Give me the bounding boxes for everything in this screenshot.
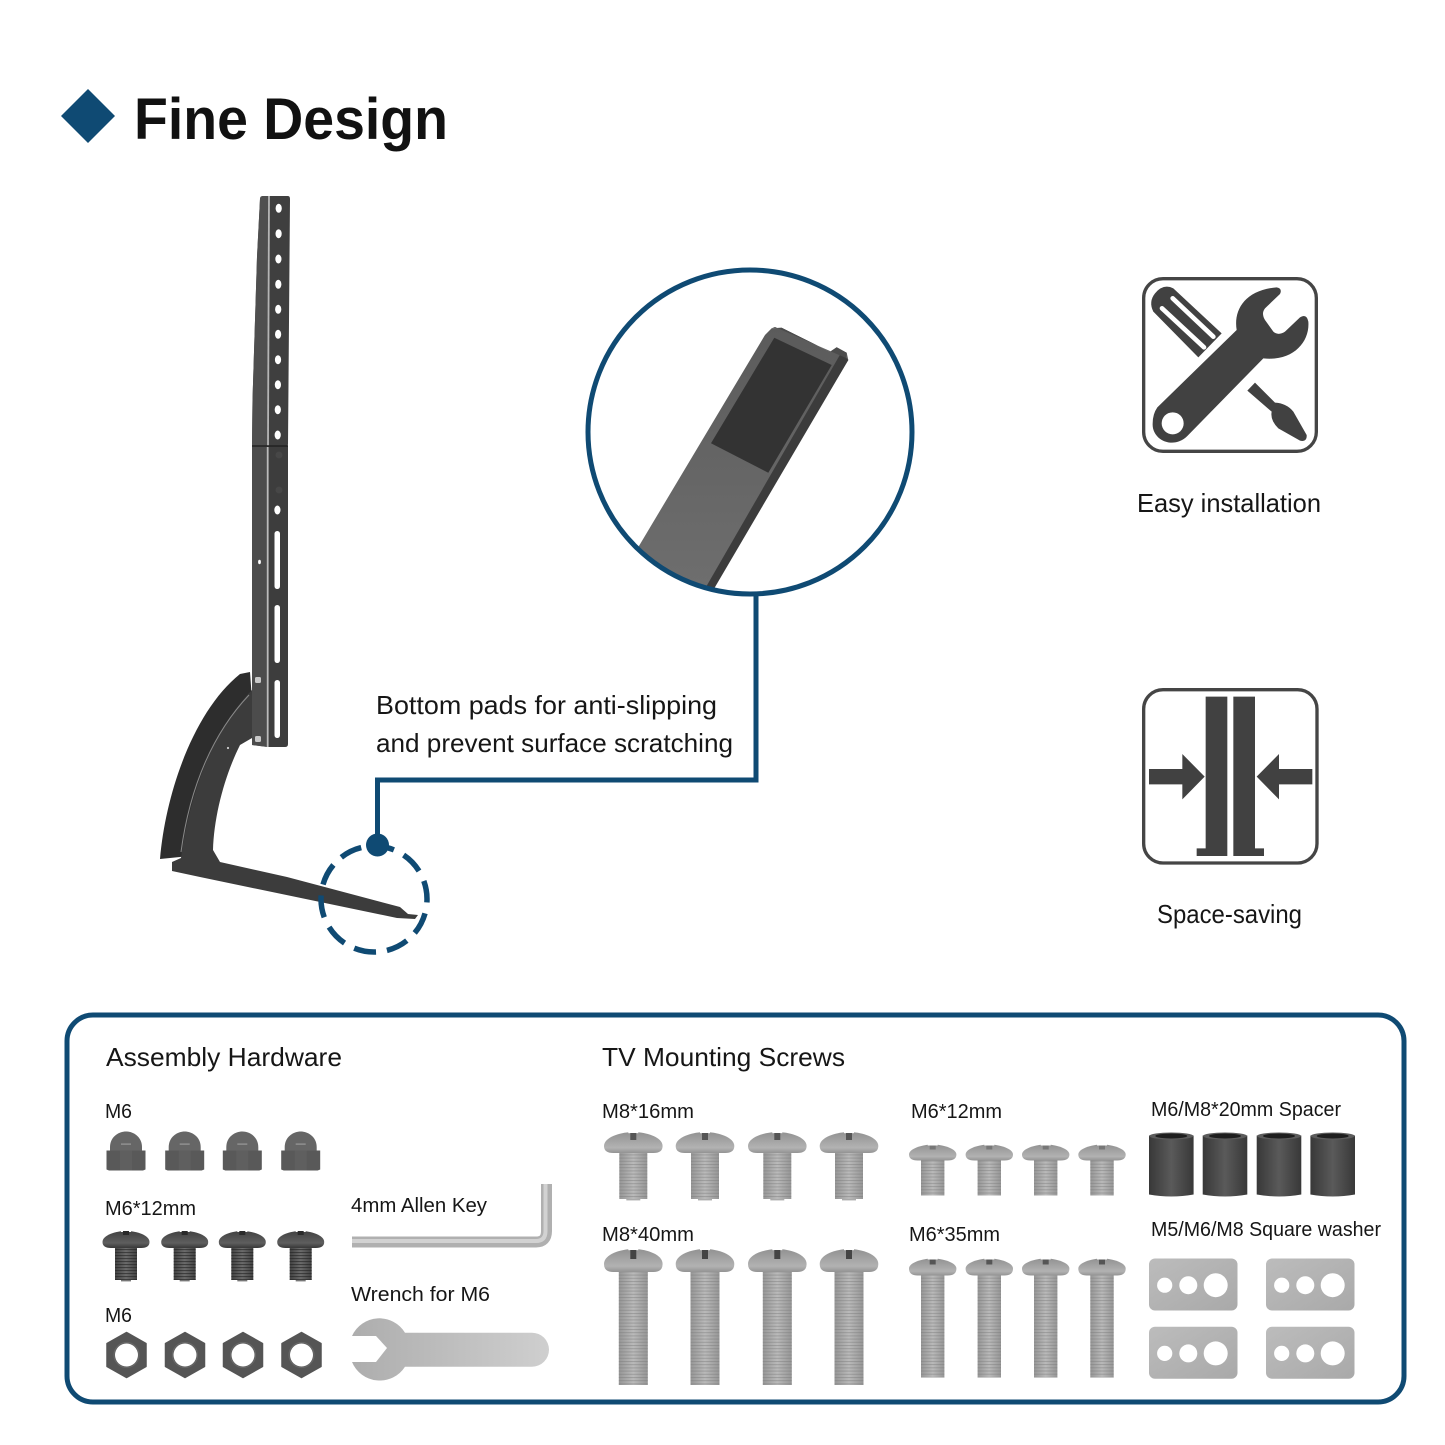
callout text	[376, 690, 733, 758]
label: M6*12mm black screws: M6*12mm	[105, 1198, 196, 1220]
black screws	[102, 1230, 324, 1281]
label: M6 cap nuts: M6	[105, 1101, 132, 1123]
M8*40mm screws	[604, 1248, 878, 1385]
callout leader line	[378, 594, 756, 845]
callout anchor dot	[366, 834, 389, 856]
allen key	[352, 1184, 546, 1242]
label: allen key: 4mm Allen Key	[351, 1195, 487, 1217]
spacers	[1149, 1132, 1355, 1196]
lower vertical arm	[252, 446, 288, 747]
M6*12mm silver screws	[909, 1144, 1126, 1196]
icon: easy installation tools	[1144, 279, 1316, 451]
label: square washers: M5/M6/M8 Square washer	[1151, 1219, 1381, 1241]
label: M6*12mm silver screws: M6*12mm	[911, 1101, 1002, 1123]
icon: space-saving	[1144, 690, 1317, 863]
mounting holes	[258, 204, 282, 738]
label: easy installation: Easy installation	[1137, 488, 1321, 518]
heading: assembly hardware: Assembly Hardware	[106, 1042, 342, 1072]
pad illustration	[638, 327, 848, 588]
curved rear bracket	[160, 672, 252, 859]
panel: hardware	[67, 1015, 1404, 1402]
label: wrench: Wrench for M6	[351, 1284, 490, 1306]
M8*16mm screws	[604, 1131, 878, 1200]
hex nuts	[107, 1332, 321, 1378]
square washers	[1149, 1258, 1354, 1379]
wrench	[352, 1318, 549, 1381]
heading: tv mounting screws: TV Mounting Screws	[602, 1042, 845, 1072]
callout magnified pad circle	[588, 270, 912, 600]
cap nuts	[106, 1132, 320, 1170]
title: Fine Design	[134, 87, 448, 152]
icon: title diamond	[61, 89, 115, 143]
M6*35mm screws	[909, 1258, 1126, 1378]
callout text: Bottom pads for anti-slipping	[376, 690, 717, 720]
label: space-saving: Space-saving	[1157, 899, 1302, 929]
stand illustration	[160, 196, 418, 919]
upper vertical arm	[252, 196, 290, 446]
bolts	[255, 677, 261, 683]
label: spacers: M6/M8*20mm Spacer	[1151, 1099, 1341, 1121]
label: M6*35mm: M6*35mm	[909, 1224, 1000, 1246]
label: M8*40mm: M8*40mm	[602, 1224, 694, 1246]
callout: dashed circle on foot tip	[321, 846, 427, 952]
label: M8*16mm: M8*16mm	[602, 1101, 694, 1123]
callout text: and prevent surface scratching	[376, 728, 733, 758]
main curved bracket and foot	[172, 690, 418, 919]
label: M6 hex nuts: M6	[105, 1305, 132, 1327]
